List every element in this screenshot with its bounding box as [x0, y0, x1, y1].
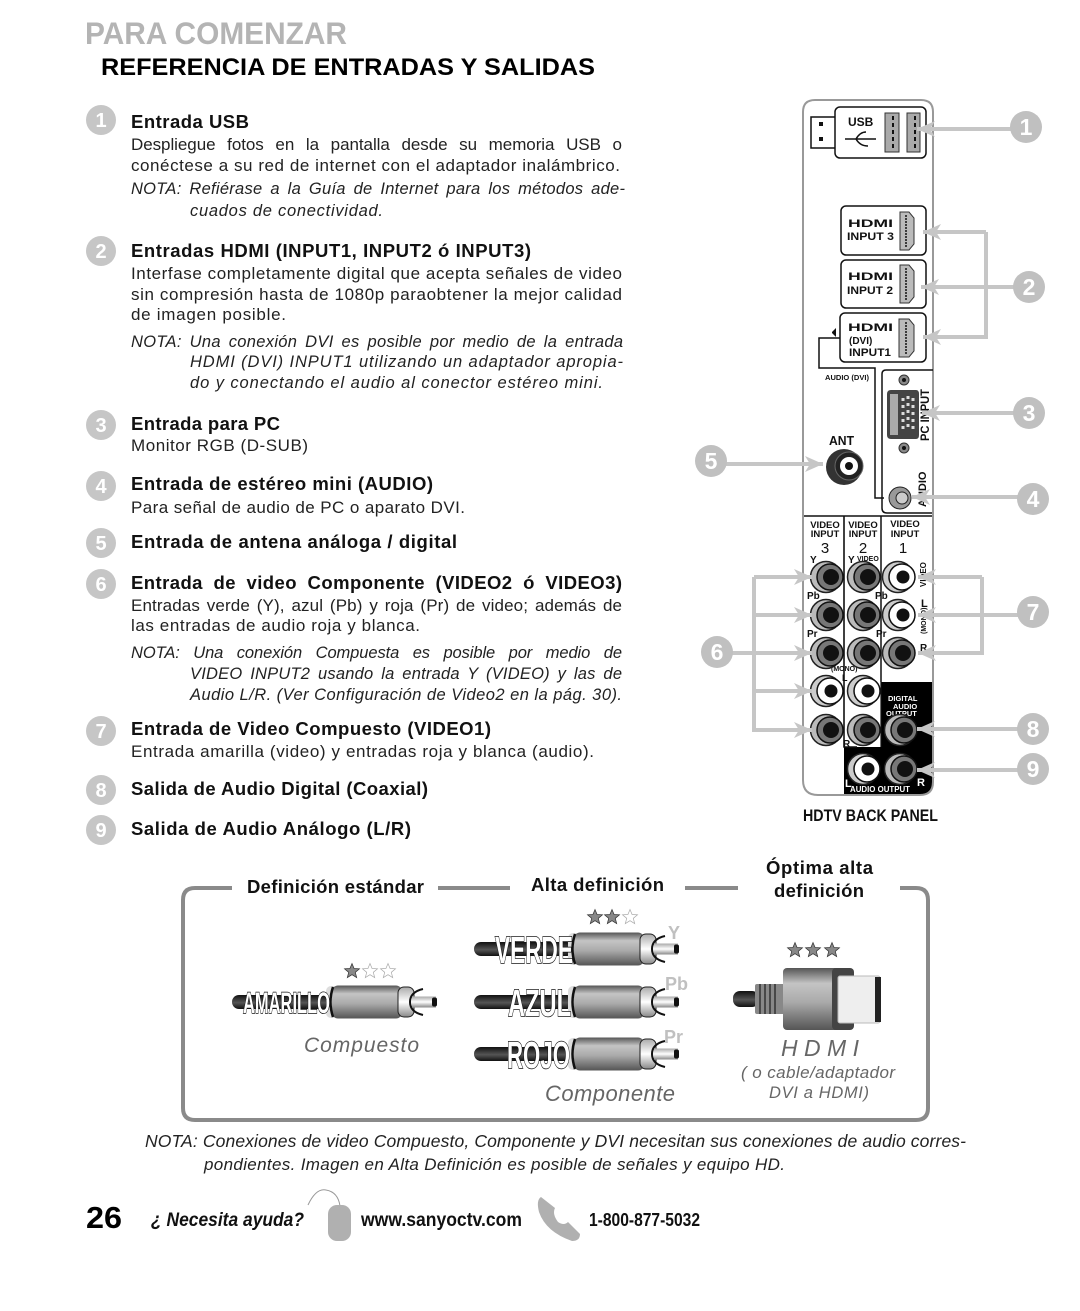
- digital and analog audio outputs: [845, 694, 925, 794]
- component plug Pr: Pr: [664, 1027, 683, 1047]
- item 6: component video: [86, 569, 622, 704]
- callout 2 with bracket arrows: [921, 232, 1045, 337]
- composite plug: [232, 964, 437, 1020]
- item 8: digital audio output: 8: [95, 780, 107, 802]
- component plug Pb: [474, 974, 688, 1025]
- video input grid: (MONO): [831, 666, 857, 673]
- video input grid: R: [920, 643, 928, 654]
- callout 9 with arrow: 9: [1027, 756, 1039, 782]
- video input grid: INPUT: [891, 529, 919, 540]
- panel outline: [803, 100, 933, 795]
- item 4: mini stereo audio: [86, 471, 465, 517]
- component plug Y: [474, 910, 680, 972]
- callout 8 with arrow: 8: [1027, 716, 1040, 742]
- HDMI caption: H D M I: [781, 1035, 860, 1061]
- PC input group: [882, 370, 933, 513]
- HDMI note: DVI a HDMI): [769, 1084, 869, 1102]
- callout 5 with arrow: [695, 445, 823, 477]
- panel caption: HDTV BACK PANEL: [803, 806, 938, 825]
- footer phone number: 1-800-877-5032: [589, 1210, 700, 1230]
- component caption: Componente: [545, 1081, 675, 1106]
- footer help text: ¿ Necesita ayuda?: [151, 1210, 304, 1231]
- HDMI input 1: INPUT1: [849, 347, 891, 359]
- video input grid: INPUT: [811, 529, 839, 540]
- video input grid: (MONO): [921, 608, 928, 634]
- footer website: www.sanyoctv.com: [360, 1210, 522, 1231]
- item 7: composite video: 7: [95, 721, 107, 743]
- item 2: HDMI inputs: Interfase completamente digital que acepta señales de video: [131, 264, 622, 283]
- HDMI input 3: [841, 206, 926, 255]
- item 8: digital audio output: Salida de Audio Digital (Coaxial): [131, 778, 428, 799]
- callout 9 with arrow: [917, 753, 1049, 785]
- item 2: HDMI inputs: NOTA: Una conexión DVI es posible por medio de la entrada: [131, 333, 623, 351]
- video input grid: Y: [810, 555, 817, 566]
- video input grid: Pb: [875, 591, 888, 602]
- callout 3 with arrow: 3: [1023, 400, 1035, 426]
- item 5: antenna input: 5: [95, 533, 107, 555]
- callout 7 with bracket arrows: 7: [1027, 599, 1039, 625]
- video input grid: R: [843, 739, 851, 750]
- callout 6 with bracket arrows: [701, 577, 812, 730]
- HDMI input 2: [841, 260, 926, 308]
- HDTV back panel diagram: [803, 100, 938, 825]
- callout 4 with arrow: [912, 483, 1049, 515]
- item 2: HDMI inputs: sin compresión hasta de 1080p paraobtener la mejor calidad: [131, 285, 622, 304]
- HDMI input 2: HDMI: [848, 271, 893, 283]
- callout 1 with arrow: [917, 111, 1042, 143]
- HDMI note: ( o cable/adaptador: [741, 1063, 896, 1082]
- item 1: USB input: [86, 105, 626, 220]
- item 8: digital audio output: [86, 775, 428, 805]
- item 6: component video: Entrada de video Componente (VIDEO2 ó VIDEO3): [131, 572, 622, 593]
- USB ports: USB: [848, 115, 874, 129]
- PC input group: PC INPUT: [918, 388, 932, 441]
- video input grid: VIDEO: [890, 519, 920, 530]
- callout 2 with bracket arrows: 2: [1023, 274, 1035, 300]
- item 1: USB input: conéctese a su red de internet con el adaptador inalámbrico.: [131, 156, 620, 175]
- item 4: mini stereo audio: Para señal de audio de PC o aparato DVI.: [131, 498, 465, 517]
- HDMI input 1: [840, 313, 926, 362]
- item 3: PC input: Entrada para PC: [131, 413, 280, 434]
- component plug Pb: Pb: [665, 974, 688, 994]
- video input grid: VIDEO: [857, 556, 879, 563]
- panel frame: [183, 888, 928, 1120]
- video input grid: INPUT: [849, 529, 877, 540]
- HDMI input 1: HDMI: [848, 322, 893, 334]
- bottom note: NOTA: Conexiones de video Compuesto, Componente y DVI necesitan sus conexiones de audio corres-: [145, 1131, 966, 1151]
- digital and analog audio outputs: AUDIO OUTPUT: [850, 785, 910, 794]
- item 2: HDMI inputs: de imagen posible.: [131, 305, 286, 324]
- item 1: USB input: NOTA: Refiérase a la Guía de Internet para los métodos ade-: [131, 180, 626, 198]
- component plug Pr: ROJO: [507, 1035, 570, 1077]
- item 7: composite video: [86, 716, 594, 761]
- HDMI plug: [733, 942, 881, 1030]
- bottom note: pondientes. Imagen en Alta Definición es posible de señales y equipo HD.: [203, 1155, 785, 1174]
- component plug Pr: [474, 1027, 683, 1077]
- heading: optimal high definition: Óptima alta: [766, 857, 874, 878]
- video input grid: 2: [859, 540, 867, 557]
- item 6: component video: las entradas de audio roja y blanca.: [131, 616, 420, 635]
- HDMI input 2: INPUT 2: [847, 285, 893, 297]
- callout 6 with bracket arrows: 6: [711, 639, 723, 665]
- icon: telephone: [538, 1197, 580, 1241]
- item 9: analog audio output: Salida de Audio Análogo (L/R): [131, 818, 411, 839]
- video input grid: VIDEO: [810, 520, 840, 531]
- item 3: PC input: [86, 410, 308, 455]
- DVI audio link line: AUDIO (DVI): [825, 375, 869, 382]
- item 5: antenna input: [86, 528, 457, 558]
- item 7: composite video: Entrada de Video Compuesto (VIDEO1): [131, 718, 491, 739]
- item 9: analog audio output: [86, 815, 411, 845]
- HDMI input 3: INPUT 3: [847, 231, 894, 243]
- item 1: USB input: 1: [95, 110, 107, 132]
- item 6: component video: 6: [95, 574, 107, 596]
- item 1: USB input: Despliegue fotos en la pantalla desde su memoria USB o: [131, 135, 622, 154]
- item 4: mini stereo audio: 4: [95, 476, 107, 498]
- section heading: REFERENCIA DE ENTRADAS Y SALIDAS: [101, 54, 595, 81]
- callout 7 with bracket arrows: [918, 577, 1049, 653]
- video input grid: L: [921, 598, 928, 610]
- video input grid: 1: [899, 540, 907, 557]
- callout 1 with arrow: 1: [1020, 114, 1033, 140]
- digital and analog audio outputs: AUDIO: [893, 702, 917, 711]
- HDMI input 1: (DVI): [849, 336, 872, 347]
- video input grid: Y: [848, 555, 855, 566]
- heading: optimal high definition: [766, 857, 874, 901]
- item 1: USB input: Entrada USB: [131, 111, 249, 132]
- page title: PARA COMENZAR: [85, 15, 347, 51]
- video input grid: VIDEO: [848, 520, 878, 531]
- video input grid: [804, 516, 932, 750]
- video input grid: Pr: [876, 629, 887, 640]
- item 7: composite video: Entrada amarilla (video) y entradas roja y blanca (audio).: [131, 742, 594, 761]
- antenna connector: [826, 433, 863, 485]
- digital and analog audio outputs: L: [845, 778, 852, 790]
- callout 3 with arrow: [922, 397, 1045, 429]
- digital and analog audio outputs: DIGITAL: [888, 694, 918, 703]
- heading: optimal high definition: definición: [774, 880, 864, 901]
- component plug Y: Y: [668, 923, 680, 943]
- video input grid: Pb: [807, 591, 820, 602]
- item 2: HDMI inputs: [86, 236, 624, 392]
- audio mini jack: [889, 471, 929, 509]
- component plug Y: VERDE: [495, 930, 573, 972]
- item 3: PC input: 3: [95, 415, 107, 437]
- HDMI note: [741, 1063, 896, 1102]
- page number: 26: [86, 1200, 122, 1235]
- item 6: component video: NOTA: Una conexión Compuesta es posible por medio de: [131, 644, 622, 662]
- callout 5 with arrow: 5: [705, 448, 718, 474]
- video input grid: VIDEO: [919, 562, 928, 587]
- item 6: component video: VIDEO INPUT2 usando la entrada Y (VIDEO) y las de: [190, 665, 622, 683]
- video input grid: L: [842, 673, 848, 683]
- DVI audio link line: [819, 328, 884, 498]
- digital and analog audio outputs: R: [917, 777, 925, 789]
- item 2: HDMI inputs: HDMI (DVI) INPUT1 utilizando un adaptador apropia-: [190, 353, 624, 371]
- item 6: component video: Audio L/R. (Ver Configuración de Video2 en la pág. 30).: [189, 686, 622, 704]
- item 3: PC input: Monitor RGB (D-SUB): [131, 436, 308, 455]
- video input grid: 3: [821, 540, 829, 557]
- item 1: USB input: cuados de conectividad.: [190, 202, 383, 220]
- bottom note: [145, 1131, 966, 1174]
- icon: mouse: [308, 1190, 351, 1241]
- black audio output area: [844, 682, 932, 794]
- audio mini jack: AUDIO: [917, 471, 929, 507]
- heading: high definition: Alta definición: [531, 874, 664, 895]
- item 2: HDMI inputs: do y conectando el audio al conector estéreo mini.: [190, 374, 603, 392]
- item 2: HDMI inputs: 2: [95, 241, 107, 263]
- item 9: analog audio output: 9: [95, 820, 107, 842]
- heading: standard definition: Definición estándar: [247, 876, 424, 897]
- HDMI input 3: HDMI: [848, 218, 893, 230]
- item 4: mini stereo audio: Entrada de estéreo mini (AUDIO): [131, 473, 433, 494]
- item 5: antenna input: Entrada de antena análoga / digital: [131, 531, 457, 552]
- USB ports: [811, 107, 926, 158]
- callout 8 with arrow: [917, 713, 1049, 745]
- component plug Pb: AZUL: [508, 983, 571, 1025]
- item 6: component video: Entradas verde (Y), azul (Pb) y roja (Pr) de video; además de: [131, 596, 622, 615]
- video input grid: Pr: [807, 629, 818, 640]
- callout 4 with arrow: 4: [1027, 486, 1040, 512]
- composite plug: AMARILLO: [243, 987, 330, 1020]
- composite caption: Compuesto: [304, 1034, 419, 1057]
- digital and analog audio outputs: OUTPUT: [886, 709, 917, 718]
- item 2: HDMI inputs: Entradas HDMI (INPUT1, INPUT2 ó INPUT3): [131, 240, 531, 261]
- antenna connector: ANT: [829, 433, 854, 448]
- cable quality panel: [183, 857, 928, 1120]
